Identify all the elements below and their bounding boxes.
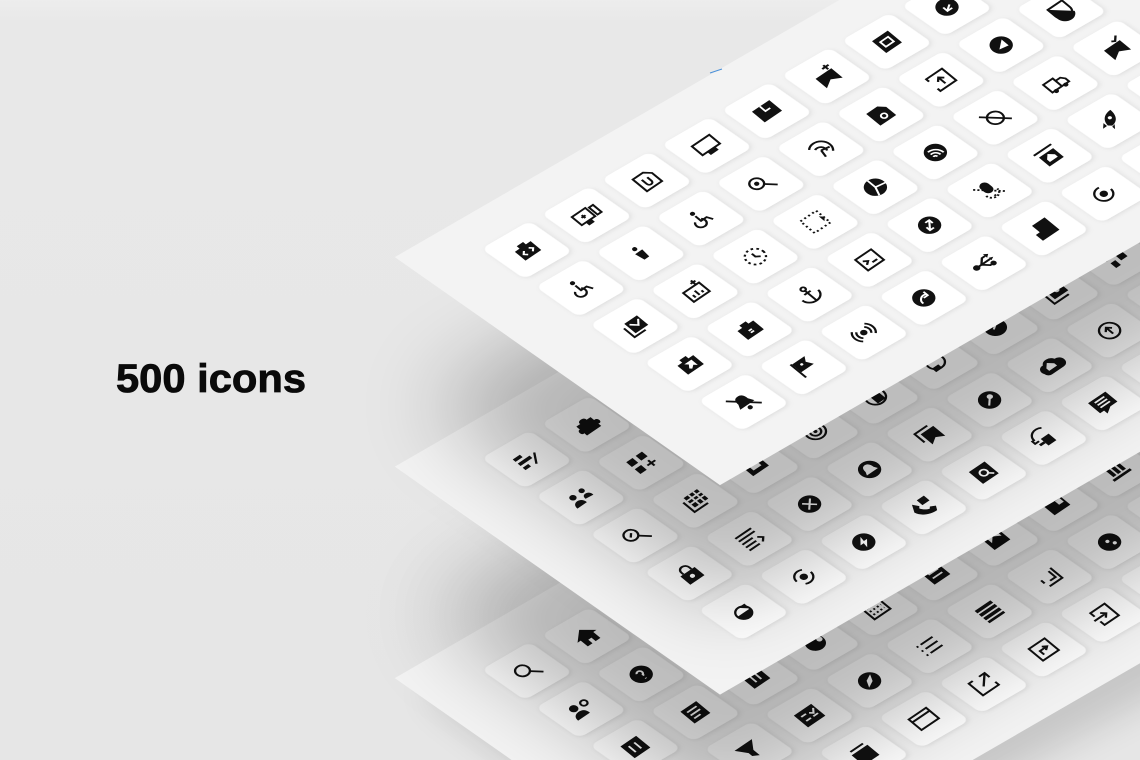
icon: article: [650, 683, 741, 741]
icon: magnifier minus: [590, 506, 681, 565]
icon: terminal: [824, 231, 915, 289]
tile: edge: [1118, 340, 1140, 398]
icon: columns: [1070, 440, 1140, 498]
icon: dashed square: [770, 193, 861, 251]
icon: flag: [758, 338, 849, 396]
icon: layered bookmark: [884, 406, 975, 464]
icon: pie chart: [830, 158, 921, 216]
icon: circle partial: [770, 614, 861, 672]
icon: briefcase: [704, 300, 795, 358]
icon: dotted list: [884, 617, 975, 675]
sheet surface: [395, 288, 1140, 760]
icon: help circle: [596, 645, 687, 703]
icon: rotate dot: [758, 548, 849, 606]
icon: usb: [938, 234, 1029, 292]
icon: wrench circle: [944, 371, 1035, 429]
icon: close circle: [764, 475, 855, 533]
icon: bell circle: [824, 440, 915, 498]
icon: stack rows: [944, 582, 1035, 641]
icon: photo: [950, 510, 1041, 568]
heading: 500 icons: 500 icons: [116, 357, 306, 401]
icon: swipe gesture: [998, 409, 1089, 467]
icon: planet: [950, 89, 1041, 147]
icon: open envelope: [590, 297, 681, 355]
icon: water drop: [698, 582, 789, 641]
tile: edge: [1118, 130, 1140, 188]
icon: mic off: [944, 161, 1035, 220]
icon: puzzle: [541, 396, 633, 454]
tile: edge: [1118, 551, 1140, 609]
icon: bag code: [481, 221, 573, 279]
icon: sort lines: [481, 430, 573, 489]
icon: bag arrow: [644, 335, 735, 393]
icon: bell off: [698, 373, 789, 431]
icon: chat list: [1058, 374, 1140, 432]
icon: lock: [644, 544, 735, 603]
icon: magnifier plus: [716, 155, 807, 213]
icon: chart plus: [650, 262, 741, 320]
icon: bookmark solid: [818, 725, 909, 760]
icon: funnel: [704, 721, 795, 760]
icon: share box: [998, 620, 1089, 679]
icon: cloud partial: [830, 368, 921, 426]
icon: bookmark plus: [781, 47, 873, 106]
icon: chevron lines: [1004, 548, 1095, 606]
icon: cloud house: [1004, 336, 1095, 394]
icon: circle partial: [950, 298, 1041, 356]
icon: folder card: [721, 82, 813, 140]
icon: wallet: [1010, 475, 1101, 533]
icon: solid document: [836, 85, 927, 144]
tile: edge: [1124, 57, 1140, 115]
icon: signal waves: [818, 304, 909, 362]
icon: antenna: [776, 120, 867, 178]
icon: swap circle: [884, 196, 975, 254]
icon: compass: [824, 652, 915, 710]
icon: stack solid: [1010, 264, 1101, 322]
icon: dotted grid: [830, 579, 921, 637]
icon: search document: [938, 444, 1029, 502]
icon: folder solid: [998, 199, 1089, 258]
panel: middle icon sheet: [395, 76, 1140, 695]
icon: delivery truck: [1010, 54, 1101, 112]
icon: dashed clock: [710, 228, 801, 286]
tile: edge: [1124, 267, 1140, 325]
blue accent mark: [710, 69, 722, 73]
sheet surface: [395, 76, 1140, 695]
icon: file shop: [1004, 127, 1095, 185]
icon: news box: [841, 13, 933, 71]
icon: anchor: [764, 266, 855, 324]
icon: triangle circle: [956, 16, 1047, 74]
panel: top icon sheet: [395, 0, 1140, 485]
icon: clock partial: [890, 333, 981, 391]
icon: monitor: [661, 117, 753, 175]
icon: monitor plus: [541, 186, 633, 244]
icon: login arrow: [1058, 586, 1140, 644]
icon: pieces: [1070, 229, 1140, 287]
icon: magnifier: [481, 642, 573, 700]
shadow cast by top sheet: [425, 0, 1140, 608]
icon: wifi circle: [890, 123, 981, 182]
icon: upload box: [896, 51, 987, 109]
icon: face circle: [1064, 513, 1140, 571]
icon: target: [770, 402, 861, 460]
icon: rocket: [1064, 92, 1140, 150]
icon: window: [878, 690, 969, 748]
icon: half shield: [1016, 0, 1107, 39]
panel: bottom icon sheet: [395, 288, 1140, 760]
icon: solid rectangle: [710, 437, 801, 495]
icon: person: [596, 224, 687, 282]
icon: arrow circle: [901, 0, 993, 36]
icon: bookmark check: [1070, 19, 1140, 77]
shadow under bottom sheet: [420, 600, 1140, 760]
icon: replay: [1058, 165, 1140, 223]
icon: file clip: [601, 152, 693, 210]
tile: edge: [1124, 478, 1140, 536]
icon: list solid: [590, 718, 681, 760]
icon: export box: [938, 655, 1029, 713]
icon: home: [541, 607, 633, 665]
icon: document lines: [890, 544, 981, 603]
icon: phone flag: [878, 478, 969, 536]
icon: wheelchair outline: [656, 190, 747, 248]
icon: up arrow circle: [1064, 302, 1140, 360]
icon: wheelchair solid: [536, 259, 627, 317]
shadow cast by middle sheet: [425, 69, 1140, 760]
icon: calendars: [650, 472, 741, 530]
icon: solid card: [710, 649, 801, 707]
icon: user settings: [536, 680, 627, 738]
icon: lightning circle: [818, 513, 909, 571]
icon: people: [536, 468, 627, 527]
icon: grid plus: [596, 434, 687, 492]
icon: list arrows: [704, 510, 795, 568]
sheet surface: [395, 0, 1140, 485]
icon: redo circle: [878, 269, 969, 327]
icon: checklist: [764, 687, 855, 745]
